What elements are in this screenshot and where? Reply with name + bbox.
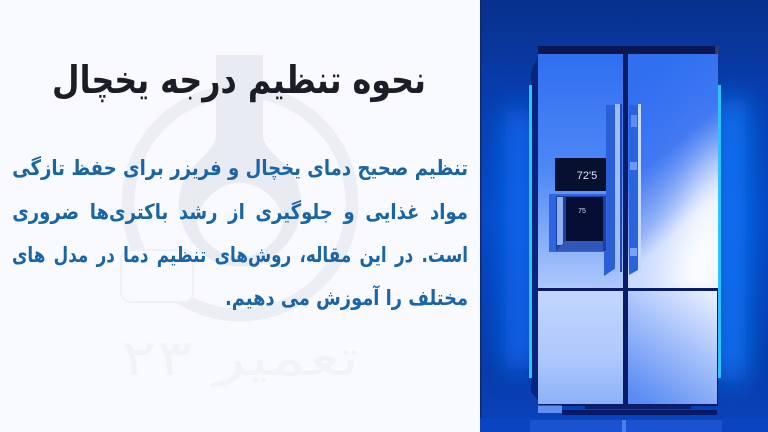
side glow	[505, 100, 746, 380]
body text: مواد غذایی و جلوگیری از رشد باکتری‌ها ضروری	[12, 200, 468, 224]
lower door left	[538, 291, 623, 404]
body text	[12, 156, 468, 310]
water dispenser	[549, 194, 607, 252]
lower door right	[628, 291, 717, 404]
watermark logo	[120, 55, 358, 322]
dispenser reading: 75	[578, 208, 586, 215]
photo: refrigerator in blue light	[480, 0, 768, 432]
handles	[604, 104, 641, 276]
floor reflection	[480, 418, 768, 432]
base	[538, 405, 562, 413]
neon strips	[529, 85, 721, 378]
watermark brand text: تعمیر ۲۳	[121, 329, 359, 387]
freezer door right	[628, 54, 718, 288]
freezer door left	[538, 54, 623, 288]
temperature reading: 72'5	[577, 170, 597, 182]
display panel	[555, 158, 606, 191]
body text: تنظیم صحیح دمای یخچال و فریزر برای حفظ تازگی	[12, 156, 468, 180]
body text: است. در این مقاله، روش‌های تنظیم دما در مدل های	[12, 243, 468, 267]
body text: مختلف را آموزش می دهیم.	[225, 286, 468, 310]
title: نحوه تنظیم درجه یخچال	[52, 58, 426, 102]
fridge body	[531, 46, 735, 415]
background	[480, 0, 768, 432]
